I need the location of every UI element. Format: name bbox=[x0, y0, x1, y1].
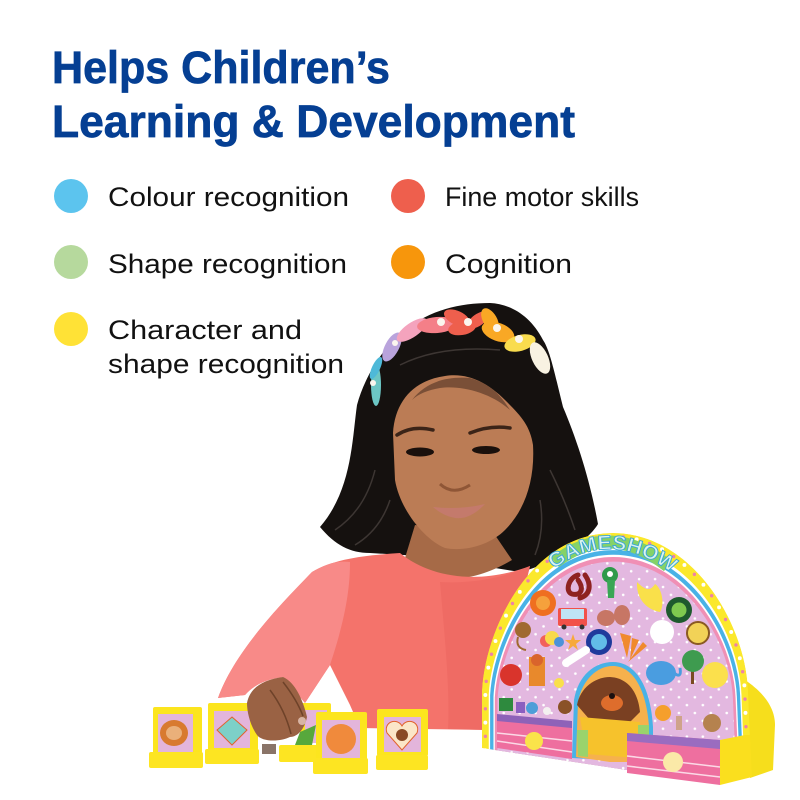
bus icon bbox=[558, 608, 587, 630]
frame dots bbox=[485, 536, 748, 775]
sleeve highlight bbox=[218, 562, 350, 703]
skills legend bbox=[54, 179, 639, 379]
nose bbox=[440, 484, 470, 490]
potatoes icon bbox=[597, 605, 630, 626]
yellow frame bbox=[482, 533, 752, 790]
table shadow under hand bbox=[262, 744, 276, 754]
card: heart bbox=[376, 709, 428, 770]
carrots icon bbox=[620, 633, 647, 662]
hand bbox=[247, 677, 307, 741]
front box bbox=[627, 733, 752, 785]
clock icon bbox=[687, 622, 709, 644]
hair highlights bbox=[335, 349, 575, 555]
left podium bbox=[497, 714, 572, 759]
lilac background bbox=[498, 562, 736, 786]
game board toy bbox=[482, 533, 775, 785]
torso shadow bbox=[440, 566, 530, 730]
duggee arch bbox=[572, 662, 653, 760]
face bbox=[393, 375, 533, 549]
legend item: shape recognition: Shape recognition bbox=[108, 249, 347, 279]
white stripe bbox=[488, 548, 744, 750]
durian icon bbox=[666, 597, 692, 623]
pink stripe bbox=[495, 557, 739, 787]
forehead hair shadow bbox=[412, 378, 510, 410]
tree icon bbox=[682, 650, 704, 684]
hair bbox=[320, 303, 598, 572]
legend item: colour recognition: Colour recognition bbox=[108, 182, 349, 212]
eyes bbox=[406, 446, 500, 456]
sticks icon bbox=[568, 575, 589, 598]
picture cards bbox=[149, 677, 428, 774]
girl bbox=[218, 303, 598, 730]
duggee bbox=[577, 677, 649, 758]
mouth bbox=[433, 504, 485, 518]
legend item: character and shape recognition: shape recognition bbox=[108, 349, 344, 379]
yellow sun icon bbox=[702, 662, 728, 688]
legend item: cognition bbox=[391, 245, 572, 279]
legend item: fine motor skills bbox=[391, 179, 639, 213]
monkey icon bbox=[515, 622, 531, 638]
board layers bbox=[482, 533, 752, 790]
sun orange icon bbox=[530, 590, 556, 616]
card: held by hand bbox=[279, 703, 331, 762]
robot icon bbox=[529, 657, 545, 686]
legend item: character and shape recognition bbox=[54, 312, 344, 379]
legend item: colour recognition bbox=[54, 179, 349, 213]
card: diamond bbox=[205, 703, 259, 764]
gameshow text: GAMESHOW bbox=[548, 534, 680, 571]
chick icon bbox=[554, 678, 564, 688]
banana icon bbox=[637, 582, 662, 612]
snake icon bbox=[602, 567, 618, 598]
blue berry icon bbox=[586, 629, 612, 655]
blue stripe bbox=[490, 550, 744, 788]
title: Helps Children’s bbox=[52, 42, 390, 93]
torso and arm bbox=[218, 553, 530, 730]
headband bbox=[367, 305, 554, 406]
card: palette bbox=[149, 707, 203, 768]
board side bbox=[745, 680, 775, 778]
card: pizza bbox=[313, 712, 368, 774]
board characters bbox=[497, 567, 752, 785]
bone icon bbox=[566, 650, 586, 663]
legend item: fine motor skills: Fine motor skills bbox=[445, 182, 639, 212]
legend item: cognition: Cognition bbox=[445, 249, 572, 279]
small characters bbox=[655, 705, 721, 732]
star icon bbox=[565, 634, 581, 650]
legend item: shape recognition bbox=[54, 245, 347, 279]
inner white stripe bbox=[493, 555, 741, 787]
sheep icon bbox=[650, 620, 674, 644]
neck bbox=[405, 525, 512, 579]
elephant icon bbox=[646, 661, 676, 685]
eyebrows bbox=[397, 427, 510, 435]
title: Learning & Development bbox=[52, 96, 575, 147]
bottom-left characters bbox=[499, 698, 572, 715]
title bbox=[52, 42, 575, 147]
legend item: character and shape recognition: Character and bbox=[108, 315, 302, 345]
red sun icon bbox=[500, 664, 522, 686]
gameshow banner bbox=[555, 542, 668, 566]
balloons icon bbox=[540, 631, 564, 647]
